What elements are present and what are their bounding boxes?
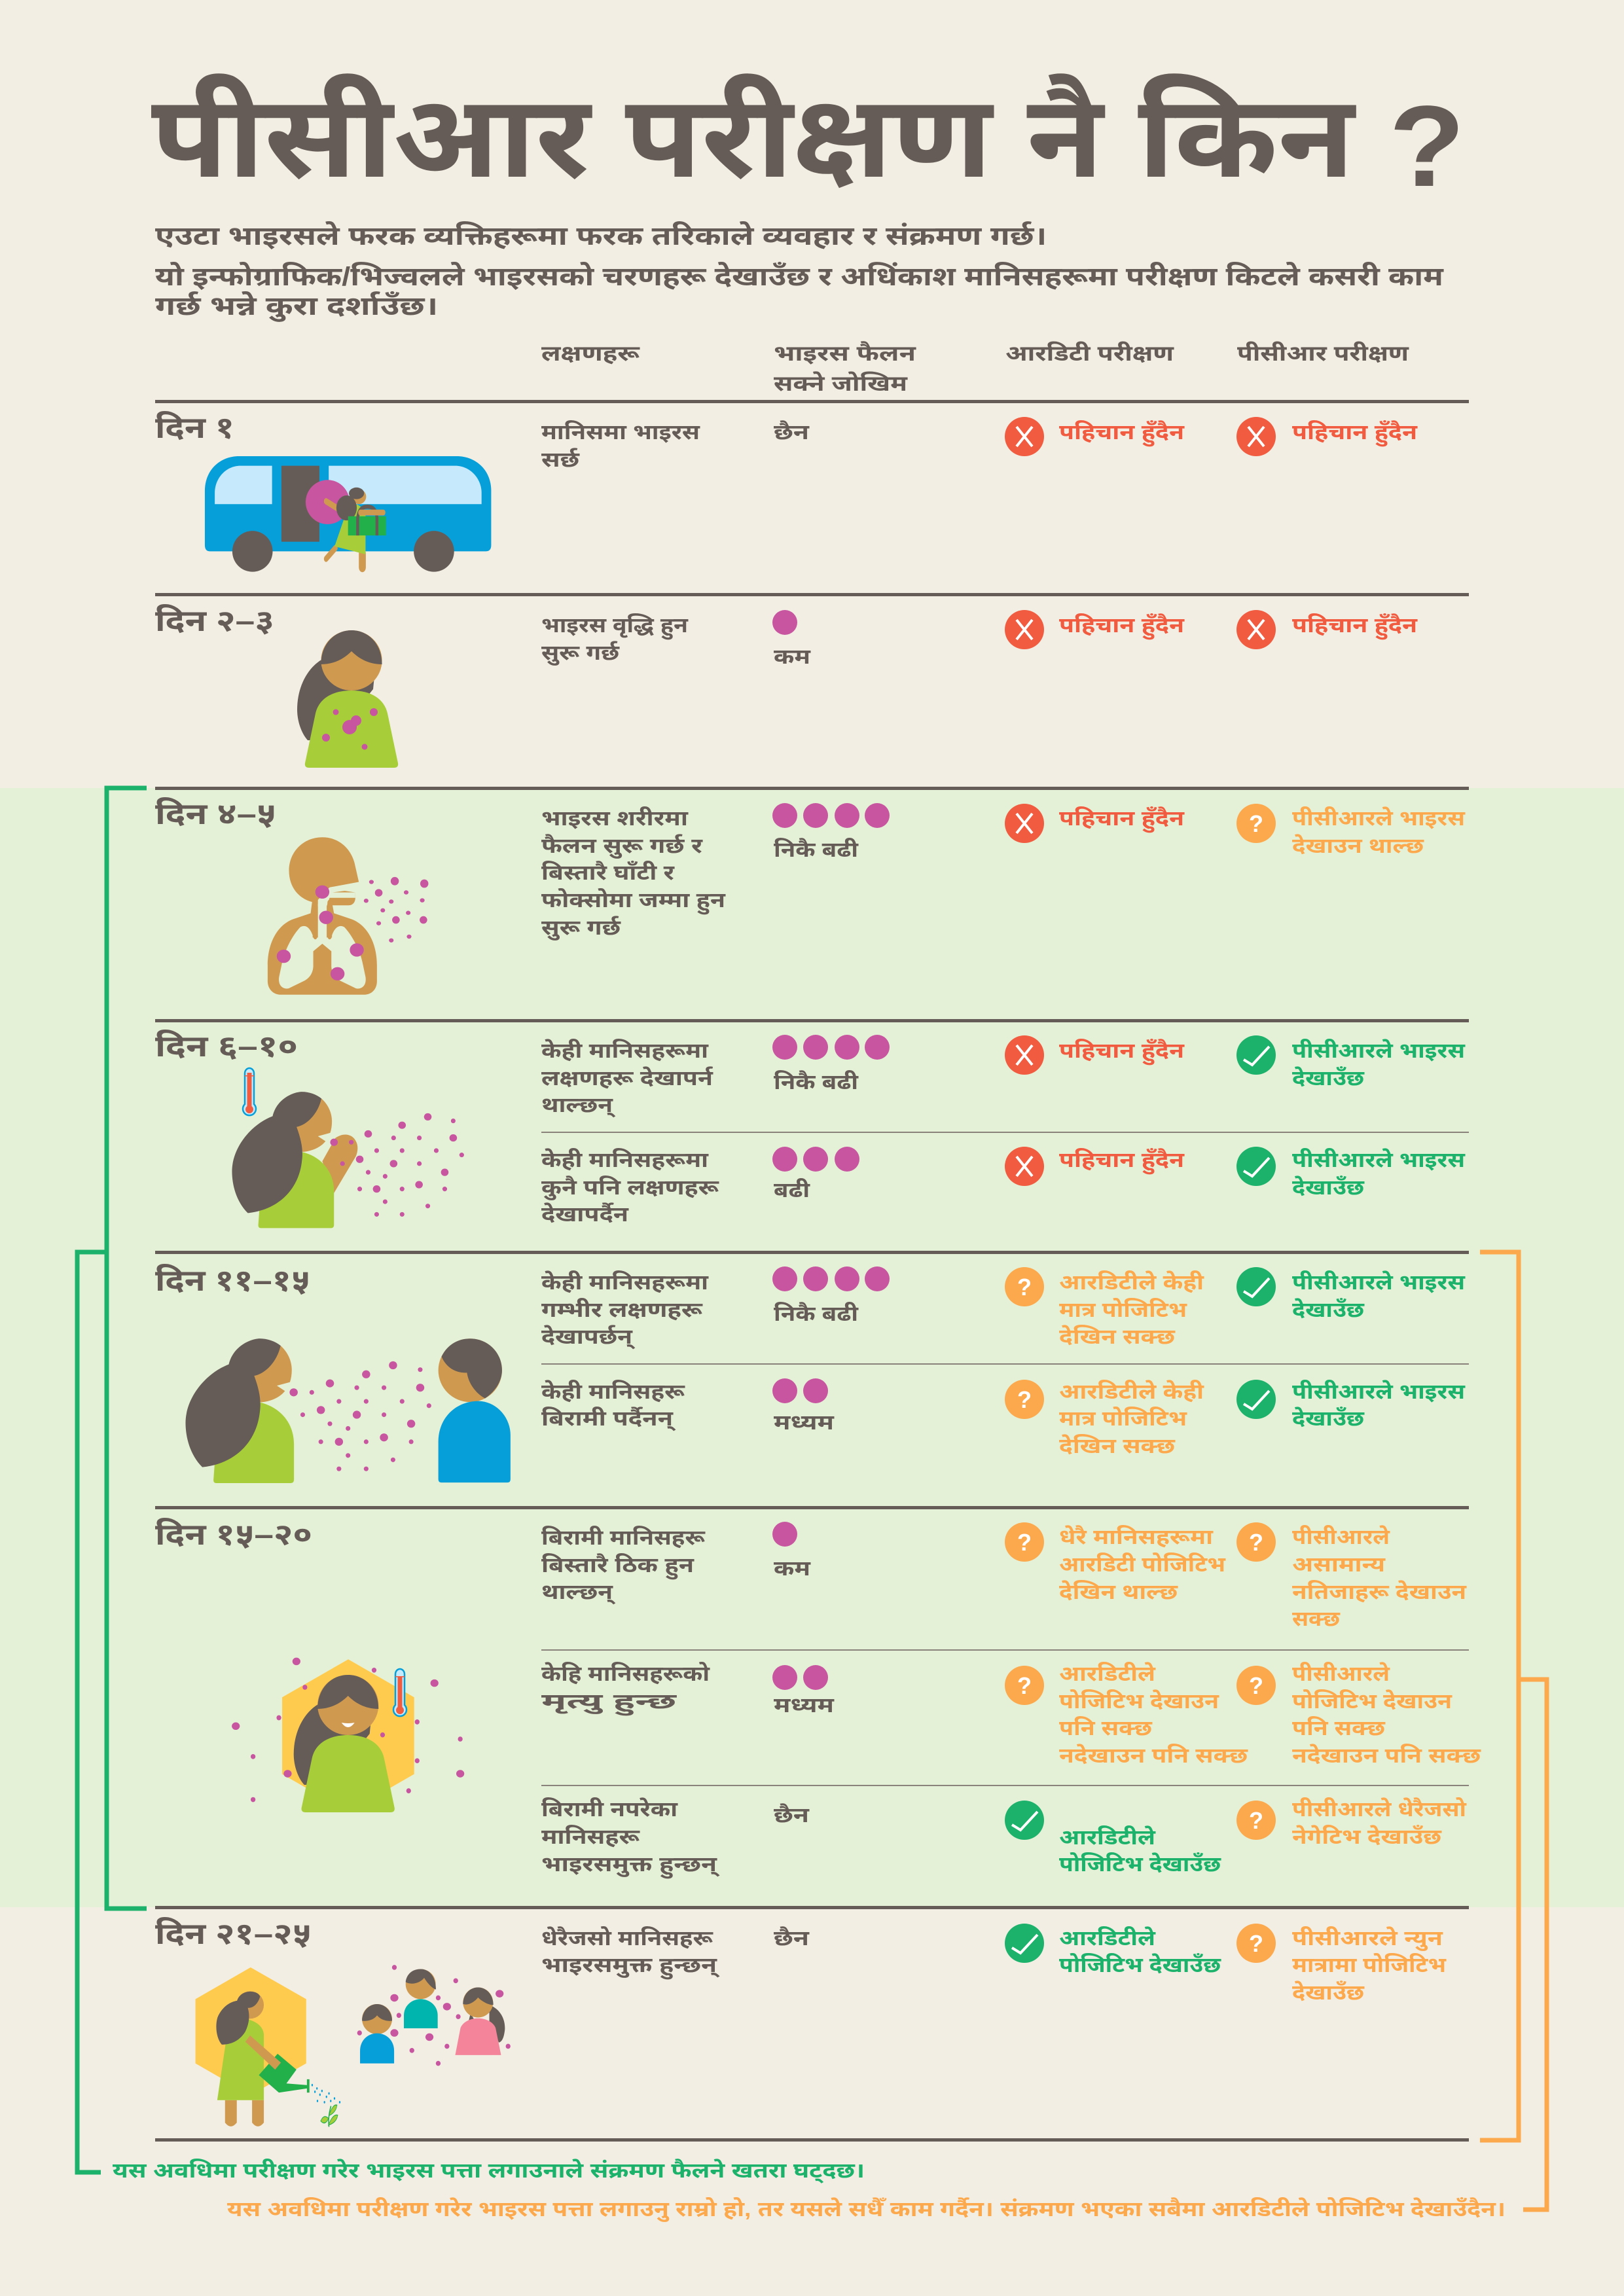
risk: medium xyxy=(772,1665,835,1717)
symptom text: फैलन सुरू गर्छ र xyxy=(541,834,703,859)
RDT result xyxy=(1005,1147,1185,1186)
day label: दिन ६–१० xyxy=(155,1029,298,1063)
symptom text: बिस्तारै ठिक हुन xyxy=(541,1553,695,1580)
symptom text: फोक्सोमा जम्मा हुन xyxy=(541,888,727,915)
symptom text: केही मानिसहरू xyxy=(541,1380,685,1403)
RDT result: पहिचान हुँदैन xyxy=(1059,420,1185,447)
orange bracket: day 11 to 25 xyxy=(1480,1252,1519,2140)
RDT result xyxy=(1005,417,1185,456)
illustration: woman watering plant and healthy people xyxy=(196,1965,511,2127)
risk: very high: निकै बढी xyxy=(774,838,859,861)
sub-row: some people show no symptoms xyxy=(541,1147,1466,1226)
row: day 15-20 xyxy=(155,1517,1481,1879)
PCR result: नतिजाहरू देखाउन xyxy=(1292,1580,1468,1604)
sub-row: never sick, virus free xyxy=(541,1797,1467,1879)
PCR result: पीसीआरले xyxy=(1292,1662,1391,1685)
symptom text: बिस्तारै घाँटी र xyxy=(541,860,675,884)
PCR result: देखाउँछ xyxy=(1292,1175,1365,1199)
risk: none: छैन xyxy=(774,1926,810,1950)
PCR result: ? xyxy=(1249,1529,1263,1556)
risk: medium: मध्यम xyxy=(774,1693,835,1717)
RDT result: आरडिटीले xyxy=(1059,1825,1157,1849)
symptom text: थाल्छन् xyxy=(541,1093,616,1118)
PCR result xyxy=(1236,1522,1468,1630)
illustration: coughing woman with thermometer xyxy=(232,1092,464,1228)
RDT result: देखिन सक्छ xyxy=(1059,1325,1176,1348)
risk: low: कम xyxy=(774,1556,811,1580)
illustration: woman with virus inside xyxy=(297,630,398,768)
row: day 4-5 xyxy=(155,797,1466,995)
row: day 21-25 xyxy=(155,1916,1447,2127)
symptom text: बिरामी मानिसहरू xyxy=(541,1526,706,1549)
green bracket: day 4 to 20 xyxy=(107,788,147,1909)
symptom text: देखापर्दैन xyxy=(541,1202,630,1226)
row: day 1 xyxy=(155,410,1418,572)
risk: none: छैन xyxy=(774,1803,810,1827)
PCR result: देखाउँछ xyxy=(1292,1297,1365,1321)
PCR result: नदेखाउन पनि सक्छ xyxy=(1292,1744,1481,1767)
row: day 11-15 xyxy=(155,1263,1466,1483)
symptom text: भाइरस शरीरमा xyxy=(541,806,689,830)
PCR result: ? xyxy=(1249,1930,1263,1957)
risk: high: बढी xyxy=(774,1178,810,1202)
orange footer note: यस अवधिमा परीक्षण गरेर भाइरस पत्ता लगाउनु राम्रो हो, तर यसले सधैँ काम गर्दैन। संक्रमण भएका सबैमा आरडिटीले पोजिटिभ देखाउँदैन। xyxy=(227,2197,1506,2222)
risk: medium xyxy=(772,1378,835,1434)
RDT result: पोजिटिभ देखाउन xyxy=(1059,1689,1219,1713)
RDT result: पहिचान हुँदैन xyxy=(1059,806,1185,833)
symptom text: देखापर्छन् xyxy=(541,1325,636,1350)
orange bracket: day 15 to footer xyxy=(1519,1679,1547,2210)
sub-row: severe symptoms xyxy=(541,1266,1466,1350)
PCR result: देखाउँछ xyxy=(1292,1406,1365,1430)
RDT result: पोजिटिभ देखाउँछ xyxy=(1059,1952,1221,1977)
PCR result xyxy=(1236,1035,1466,1090)
row: day 2-3 xyxy=(155,603,1418,768)
PCR result: पीसीआरले भाइरस xyxy=(1292,1270,1466,1294)
RDT result: पोजिटिभ देखाउँछ xyxy=(1059,1852,1221,1876)
symptom text xyxy=(541,613,689,666)
RDT result: आरडिटीले केही xyxy=(1059,1270,1204,1294)
RDT result: मात्र पोजिटिभ xyxy=(1059,1407,1187,1430)
symptom text xyxy=(541,420,701,471)
symptom text: धेरैजसो मानिसहरू xyxy=(541,1926,713,1950)
symptom text xyxy=(541,1148,719,1226)
intro text xyxy=(155,221,1444,322)
symptom text: लक्षणहरू देखापर्न xyxy=(541,1066,714,1090)
symptom text xyxy=(541,1797,720,1879)
PCR result: पीसीआरले न्युन xyxy=(1292,1926,1444,1951)
PCR result: देखाउन थाल्छ xyxy=(1292,834,1424,857)
PCR result: देखाउँछ xyxy=(1292,1066,1365,1090)
RDT result: आरडिटीले xyxy=(1059,1926,1157,1950)
title: ? xyxy=(1389,82,1465,211)
RDT result xyxy=(1005,1267,1204,1348)
intro text: यो इन्फोग्राफिक/भिज्वलले भाइरसको चरणहरू देखाउँछ र अधिंकाश मानिसहरूमा परीक्षण किटले कसरी काम xyxy=(155,262,1444,291)
PCR result xyxy=(1236,610,1418,649)
intro text: गर्छ भन्ने कुरा दर्शाउँछ। xyxy=(155,291,438,322)
symptom text: सुरू गर्छ xyxy=(541,916,621,941)
PCR result: पीसीआरले भाइरस xyxy=(1292,806,1466,830)
risk: very high: निकै बढी xyxy=(774,1302,859,1325)
risk: very high xyxy=(772,1035,890,1094)
PCR result: पीसीआरले भाइरस xyxy=(1292,1148,1466,1172)
RDT result xyxy=(1005,1522,1226,1604)
RDT result: धेरै मानिसहरूमा xyxy=(1059,1525,1214,1549)
symptom text: केही मानिसहरूमा xyxy=(541,1148,709,1172)
RDT result: आरडिटीले केही xyxy=(1059,1380,1204,1403)
RDT result: पहिचान हुँदैन xyxy=(1059,1038,1185,1066)
symptom text: भाइरस वृद्धि हुन xyxy=(541,613,689,640)
RDT result xyxy=(1005,1035,1185,1075)
column headers: लक्षणहरू xyxy=(541,341,641,365)
symptom text: केही मानिसहरूमा xyxy=(541,1270,709,1294)
symptom text: बिरामी पर्दैनन् xyxy=(541,1407,676,1431)
PCR result xyxy=(1236,1147,1466,1199)
sub-row: not sick xyxy=(541,1378,1466,1458)
RDT result xyxy=(1005,1924,1221,1977)
PCR result xyxy=(1236,1924,1447,2004)
RDT result xyxy=(1005,804,1185,843)
row: day 6-10 xyxy=(155,1029,1466,1228)
RDT result: देखिन थाल्छ xyxy=(1059,1580,1178,1604)
risk: low xyxy=(772,1522,811,1580)
RDT result: आरडिटीले xyxy=(1059,1662,1157,1685)
PCR result xyxy=(1236,1797,1467,1848)
column headers: आरडिटी परीक्षण xyxy=(1005,341,1175,365)
illustration: woman boarding bus xyxy=(205,456,491,572)
symptom text xyxy=(541,1526,706,1605)
risk: low: कम xyxy=(774,645,811,668)
symptom text xyxy=(541,806,727,941)
PCR result: पीसीआरले भाइरस xyxy=(1292,1380,1466,1403)
PCR result: ? xyxy=(1249,810,1263,837)
symptom text: सुरू गर्छ xyxy=(541,641,620,666)
day label: दिन २१–२५ xyxy=(155,1916,312,1950)
day label: दिन ११–१५ xyxy=(155,1263,310,1297)
PCR result: पीसीआरले धेरैजसो xyxy=(1292,1797,1467,1821)
RDT result: पहिचान हुँदैन xyxy=(1059,1147,1185,1175)
illustration: smiling woman in hexagon xyxy=(232,1658,464,1812)
PCR result: पीसीआरले भाइरस xyxy=(1292,1039,1466,1062)
RDT result xyxy=(1005,1801,1221,1876)
symptom text: कुनै पनि लक्षणहरू xyxy=(541,1175,719,1200)
RDT result: ? xyxy=(1017,1672,1032,1699)
green highlighted band xyxy=(0,788,1624,1907)
column headers: सक्ने जोखिम xyxy=(774,370,908,395)
column headers xyxy=(541,340,1410,395)
day label: दिन २–३ xyxy=(155,603,274,637)
PCR result: ? xyxy=(1249,1672,1263,1699)
risk: very high xyxy=(772,1266,890,1325)
RDT result: देखिन सक्छ xyxy=(1059,1434,1176,1458)
risk: low xyxy=(772,610,811,668)
RDT result: ? xyxy=(1017,1274,1032,1300)
day label: दिन १५–२० xyxy=(155,1517,312,1551)
RDT result: आरडिटी पोजिटिभ xyxy=(1059,1552,1226,1576)
RDT result: मात्र पोजिटिभ xyxy=(1059,1298,1187,1321)
PCR result xyxy=(1236,417,1418,456)
column headers: भाइरस फैलन xyxy=(774,340,916,365)
symptom text: थाल्छन् xyxy=(541,1580,616,1605)
risk: medium: मध्यम xyxy=(774,1410,835,1434)
RDT result: ? xyxy=(1017,1529,1032,1556)
RDT result xyxy=(1005,610,1185,649)
PCR result: पहिचान हुँदैन xyxy=(1292,613,1418,640)
symptom text: गम्भीर लक्षणहरू xyxy=(541,1298,703,1321)
symptom text xyxy=(541,1039,714,1118)
icon: thermometer xyxy=(393,1669,406,1716)
day label: दिन १ xyxy=(155,410,234,444)
RDT result: पनि सक्छ xyxy=(1059,1716,1153,1740)
PCR result: मात्रामा पोजिटिभ xyxy=(1292,1953,1447,1977)
sub-row: recovering xyxy=(541,1522,1468,1630)
green footer note: यस अवधिमा परीक्षण गरेर भाइरस पत्ता लगाउनाले संक्रमण फैलने खतरा घट्दछ। xyxy=(113,2159,865,2183)
RDT result: नदेखाउन पनि सक्छ xyxy=(1059,1744,1248,1767)
risk: very high: निकै बढी xyxy=(774,1070,859,1094)
symptom text xyxy=(541,1662,710,1716)
PCR result xyxy=(1236,1662,1481,1767)
PCR result: पीसीआरले xyxy=(1292,1525,1391,1549)
RDT result: पहिचान हुँदैन xyxy=(1059,613,1185,640)
symptom text: सर्छ xyxy=(541,448,580,471)
PCR result: असामान्य xyxy=(1292,1552,1386,1576)
RDT result xyxy=(1005,1380,1204,1458)
risk: high xyxy=(772,1147,859,1202)
illustration: virus spreading between two people xyxy=(185,1338,511,1483)
symptom text xyxy=(541,1380,685,1431)
symptom text: केही मानिसहरूमा xyxy=(541,1039,709,1062)
sub-row: some people show symptoms xyxy=(541,1035,1466,1118)
PCR result: पनि सक्छ xyxy=(1292,1716,1386,1740)
PCR result xyxy=(1236,804,1466,857)
icon: thermometer xyxy=(243,1068,256,1115)
green bracket: day 11 to 25 xyxy=(77,1252,107,2172)
symptom text: मृत्यु हुन्छ xyxy=(541,1689,677,1716)
risk: very high xyxy=(772,803,890,861)
column headers: पीसीआर परीक्षण xyxy=(1237,341,1410,365)
risk: none: छैन xyxy=(774,420,810,444)
PCR result: पहिचान हुँदैन xyxy=(1292,420,1418,447)
RDT result: ? xyxy=(1017,1386,1032,1413)
PCR result: सक्छ xyxy=(1292,1607,1341,1630)
day label: दिन ४–५ xyxy=(155,797,276,831)
sub-row: some die xyxy=(541,1662,1481,1767)
symptom text: मानिसहरू xyxy=(541,1825,640,1848)
symptom text: मानिसमा भाइरस xyxy=(541,420,701,444)
PCR result xyxy=(1236,1267,1466,1321)
symptom text xyxy=(541,1926,720,1980)
symptom text: भाइरसमुक्त हुन्छन् xyxy=(541,1953,720,1980)
symptom text: बिरामी नपरेका xyxy=(541,1797,678,1821)
title: पीसीआर परीक्षण नै किन xyxy=(151,73,1265,202)
symptom text xyxy=(541,1270,709,1350)
PCR result: पोजिटिभ देखाउन xyxy=(1292,1689,1453,1713)
PCR result: ? xyxy=(1249,1807,1263,1834)
RDT result xyxy=(1005,1662,1248,1767)
intro text: एउटा भाइरसले फरक व्यक्तिहरूमा फरक तरिकाले व्यवहार र संक्रमण गर्छ। xyxy=(155,221,1047,251)
symptom text: केहि मानिसहरूको xyxy=(541,1662,710,1685)
PCR result xyxy=(1236,1380,1466,1430)
symptom text: भाइरसमुक्त हुन्छन् xyxy=(541,1852,720,1879)
illustration: lungs and airway xyxy=(268,837,428,995)
PCR result: देखाउँछ xyxy=(1292,1980,1365,2004)
PCR result: नेगेटिभ देखाउँछ xyxy=(1292,1824,1442,1848)
